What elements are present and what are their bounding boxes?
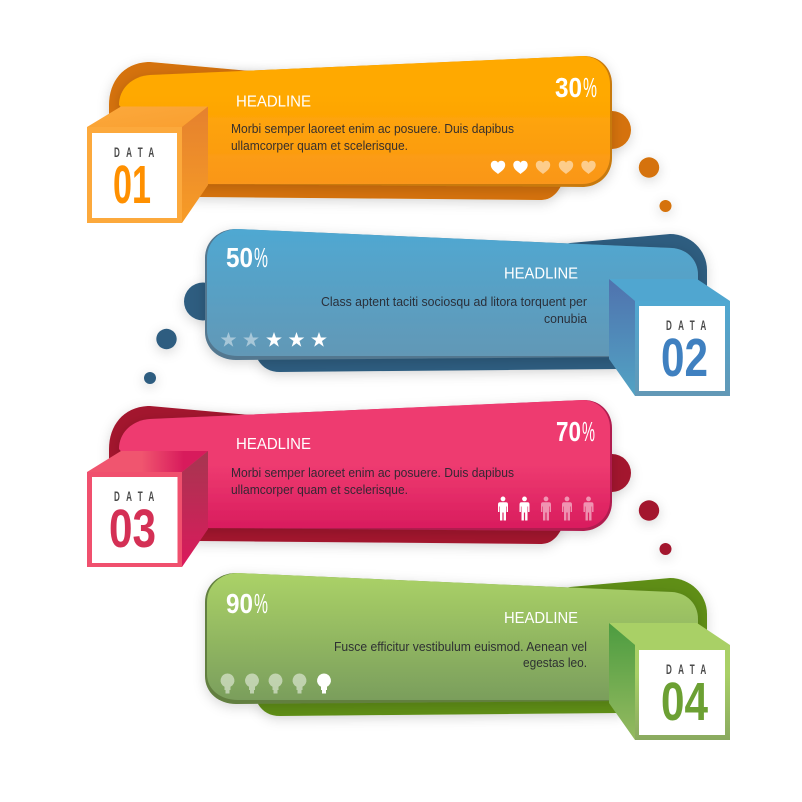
icon row: stars <box>221 332 327 347</box>
panel: 04 green <box>205 573 730 740</box>
back ribbon: blue <box>258 234 707 372</box>
back ribbon: orange <box>109 62 561 200</box>
body text: Fusce efficitur vestibulum euismod. Aenean vel <box>334 639 587 654</box>
percentage: 50%: % <box>254 242 268 273</box>
heading: HEADLINE <box>504 610 578 627</box>
front card: pink <box>119 400 612 531</box>
data cube 03 <box>87 451 208 567</box>
data cube 04: 04 <box>661 672 708 732</box>
body text: Class aptent taciti sociosqu ad litora torquent per <box>321 294 588 309</box>
data cube 02 <box>609 279 730 396</box>
panel: 03 pink <box>87 400 672 567</box>
front card: blue <box>205 229 698 360</box>
data cube 04: DATA <box>666 663 712 678</box>
percentage: 70%: % <box>582 416 595 447</box>
percentage: 70%: 70 <box>556 416 581 447</box>
heading: HEADLINE <box>236 436 311 453</box>
data cube 04 <box>609 623 730 740</box>
front card: orange <box>119 56 612 187</box>
body text <box>321 294 588 326</box>
icon row: hearts <box>491 161 596 174</box>
body text: Morbi semper laoreet enim ac posuere. Duis dapibus <box>231 465 514 480</box>
decorative bubbles: crimson <box>593 454 672 555</box>
icon row: people <box>498 496 594 520</box>
body text <box>231 465 514 497</box>
body text: Morbi semper laoreet enim ac posuere. Duis dapibus <box>231 121 514 136</box>
panel: 02 blue <box>144 229 730 396</box>
back ribbon: crimson <box>109 406 561 544</box>
data cube 01: 01 <box>113 155 151 215</box>
data cube 01: DATA <box>114 146 160 161</box>
percentage: 30%: 30 <box>555 72 582 103</box>
heading: HEADLINE <box>236 94 311 110</box>
data cube 01 <box>87 106 208 223</box>
data cube 02: DATA <box>666 319 712 334</box>
front card: green <box>205 573 698 704</box>
back ribbon: green <box>258 578 707 716</box>
data cube 03: DATA <box>114 490 160 505</box>
body text <box>334 639 587 670</box>
decorative bubbles: blue <box>144 282 222 384</box>
percentage: 30%: % <box>583 72 597 103</box>
panel: 01 orange <box>87 56 672 223</box>
body text: egestas leo. <box>523 655 587 670</box>
data cube 02: 02 <box>661 328 708 388</box>
heading: HEADLINE <box>504 266 578 282</box>
data cube 03: 03 <box>109 499 156 559</box>
percentage: 90%: % <box>254 588 268 619</box>
decorative bubbles: orange <box>593 111 672 212</box>
percentage: 50%: 50 <box>226 242 253 273</box>
body text: ullamcorper quam et scelerisque. <box>231 138 408 153</box>
body text: conubia <box>544 311 588 326</box>
icon row: light bulbs <box>221 674 331 694</box>
body text: ullamcorper quam et scelerisque. <box>231 482 408 497</box>
body text <box>231 121 514 153</box>
percentage: 90%: 90 <box>226 588 253 619</box>
